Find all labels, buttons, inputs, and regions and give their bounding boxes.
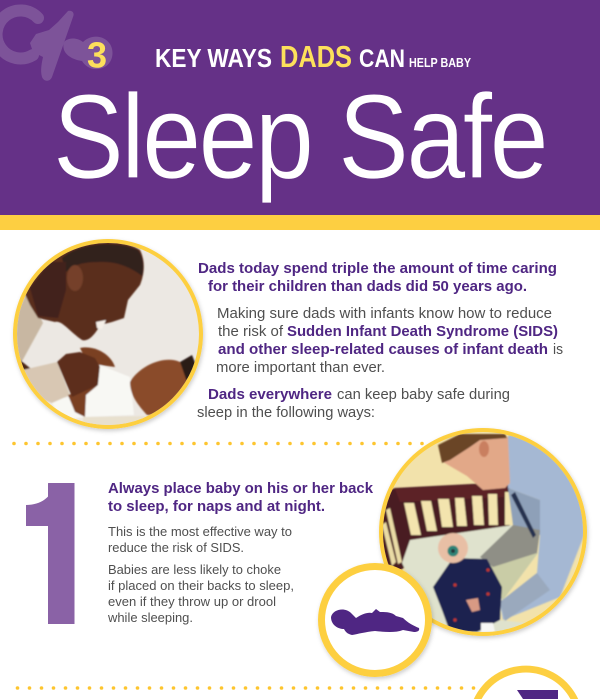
title: Sleep Safe: [53, 70, 546, 204]
step 1 body: even if they throw up or drool: [108, 595, 276, 609]
photo: father and baby: [13, 239, 204, 432]
number 1: 1: [0, 439, 112, 668]
icon: baby silhouette: [331, 609, 419, 635]
intro paragraph: the risk of: [218, 324, 284, 340]
intro paragraph: more important than ever.: [216, 360, 385, 376]
intro paragraph: Making sure dads with infants know how to reduce: [217, 306, 552, 322]
icon circle: baby on back: [322, 566, 428, 674]
icon: crib fragment: [517, 690, 558, 699]
step 1 body: while sleeping.: [107, 611, 193, 625]
intro paragraph: is: [553, 342, 563, 358]
kicker line: CAN: [359, 45, 405, 73]
kicker line: DADS: [280, 39, 352, 74]
intro text: [197, 261, 563, 421]
header banner: [0, 0, 600, 230]
icon: pacifier: [0, 10, 113, 81]
photo: father placing baby in crib: [378, 428, 590, 636]
intro paragraph: and other sleep-related causes of infant death: [218, 342, 548, 358]
step 1 body: reduce the risk of SIDS.: [108, 541, 244, 555]
step 1 body: This is the most effective way to: [108, 525, 292, 539]
step 1 body: Babies are less likely to choke: [108, 563, 281, 577]
step 1 heading: Always place baby on his or her back: [108, 481, 374, 497]
kicker line: HELP BABY: [409, 55, 471, 70]
step 1 heading: to sleep, for naps and at night.: [108, 499, 325, 515]
step 1 body: if placed on their backs to sleep,: [108, 579, 294, 593]
kicker line: KEY WAYS: [155, 43, 272, 73]
intro headline: for their children than dads did 50 years ago.: [208, 279, 527, 295]
dads everywhere text: sleep in the following ways:: [197, 405, 375, 421]
dads everywhere text: Dads everywhere: [208, 387, 332, 403]
icon circle: next step: [474, 666, 578, 699]
intro paragraph: Sudden Infant Death Syndrome (SIDS): [287, 324, 558, 340]
dads everywhere text: can keep baby safe during: [337, 387, 510, 403]
number 3: 3: [87, 34, 107, 76]
intro headline: Dads today spend triple the amount of time caring: [198, 261, 557, 277]
